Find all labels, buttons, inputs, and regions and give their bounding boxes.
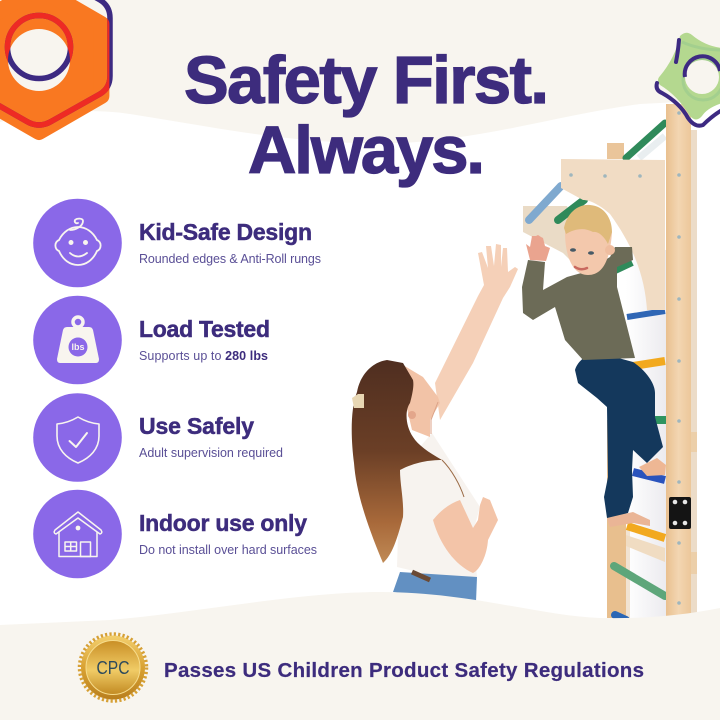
certification statement: Passes US Children Product Safety Regulations (164, 659, 644, 682)
decorative nut: green star (657, 33, 720, 126)
feature: indoor use only (33, 490, 317, 578)
heading: Kid-Safe Design (139, 219, 312, 245)
title: Always. (248, 113, 485, 188)
description: Adult supervision required (139, 446, 283, 460)
badge: CPC gold seal: CPC (96, 658, 130, 678)
icon: house (33, 490, 122, 578)
feature: kid-safe design (33, 199, 321, 287)
description: Do not install over hard surfaces (139, 543, 317, 557)
title (184, 43, 549, 188)
decorative nut: orange hexagon (0, 0, 110, 132)
feature: use safely (33, 393, 283, 482)
description: Supports up to 280 lbs (139, 349, 268, 363)
feature: load tested (33, 296, 270, 384)
background: white wave panel (0, 100, 720, 625)
description: Rounded edges & Anti-Roll rungs (139, 252, 321, 266)
badge: CPC gold seal (80, 634, 146, 701)
icon: baby face (33, 199, 122, 287)
photo: woman reaching up (352, 244, 518, 602)
photo: boy climbing (522, 205, 666, 527)
heading: Load Tested (139, 316, 270, 342)
heading: Indoor use only (139, 510, 307, 536)
icon: weight (33, 296, 122, 384)
icon: shield (33, 393, 122, 482)
title: Safety First. (184, 43, 549, 118)
heading: Use Safely (139, 413, 254, 439)
bottom cream wave (0, 592, 720, 720)
photo: climbing wall ladder (523, 104, 697, 620)
icon: weight: lbs (71, 342, 85, 352)
